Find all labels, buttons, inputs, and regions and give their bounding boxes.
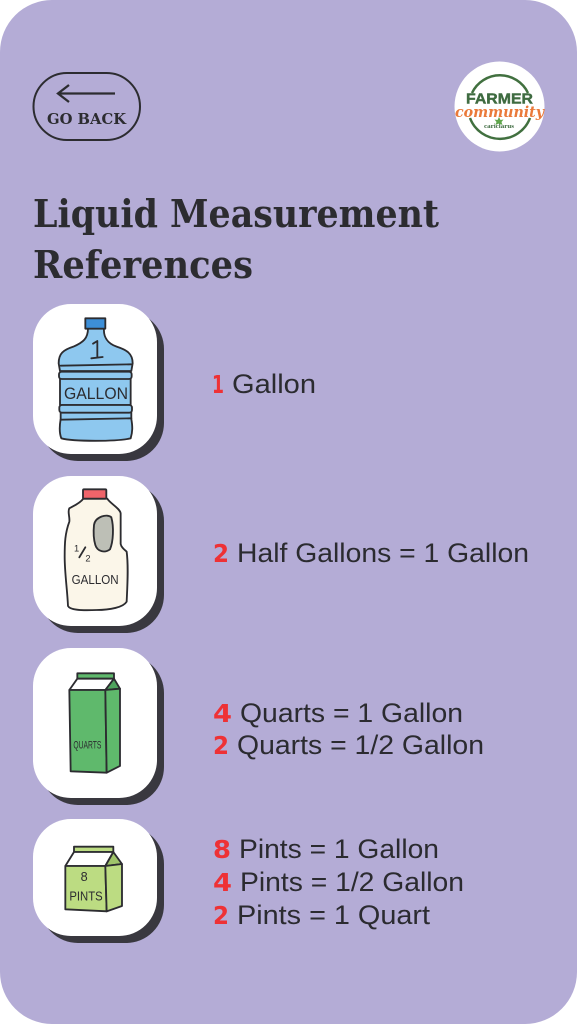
row text: quarts: 4 <box>213 699 232 728</box>
row text: pints <box>213 834 464 930</box>
panel: quarts card <box>33 648 164 805</box>
panel: pints card <box>33 819 164 943</box>
title: References <box>33 242 253 287</box>
icon: half gallon jug: GALLON <box>72 572 119 587</box>
logo: farmer community: community <box>455 103 545 121</box>
row text: 1 gallon: 1 <box>212 370 224 399</box>
row text: quarts <box>213 698 484 760</box>
row text: pints: Pints = 1/2 Gallon <box>240 867 464 897</box>
row text: quarts: Quarts = 1 Gallon <box>240 698 463 728</box>
row text: half gallons: Half Gallons = 1 Gallon <box>237 538 529 568</box>
logo: farmer community <box>454 62 545 152</box>
row text: pints: 8 <box>213 835 231 864</box>
panel: half gallon card <box>33 476 164 633</box>
icon: quart carton: QUARTS <box>73 739 102 751</box>
icon: pint carton: PINTS <box>69 890 103 904</box>
row text: pints: 2 <box>213 901 229 930</box>
icon: pint carton <box>65 847 122 911</box>
panel: 1 gallon card <box>33 304 164 461</box>
row text: pints: 4 <box>213 868 232 897</box>
icon: pint carton: 8 <box>81 870 88 884</box>
go back button: GO BACK <box>47 110 127 128</box>
row text: pints: Pints = 1 Quart <box>237 900 431 930</box>
logo: farmer community: cariclarus <box>484 123 515 130</box>
icon: quart carton <box>69 673 120 773</box>
icon: half gallon jug: 2 <box>85 553 91 563</box>
row text: pints: Pints = 1 Gallon <box>239 834 439 864</box>
row text: 1 gallon: Gallon <box>232 369 316 399</box>
go back button <box>34 73 140 140</box>
title: Liquid Measurement <box>33 191 439 236</box>
icon: water bottle: GALLON <box>64 384 128 403</box>
row text: quarts: 2 <box>213 731 229 760</box>
title <box>33 191 439 287</box>
row text: quarts: Quarts = 1/2 Gallon <box>237 730 484 760</box>
logo: farmer community: FARMER <box>466 92 534 108</box>
icon: half gallon jug: 1 <box>74 543 79 553</box>
row text: half gallons: 2 <box>213 539 229 568</box>
icon: half gallon jug <box>65 489 128 610</box>
icon: water bottle <box>59 318 133 441</box>
